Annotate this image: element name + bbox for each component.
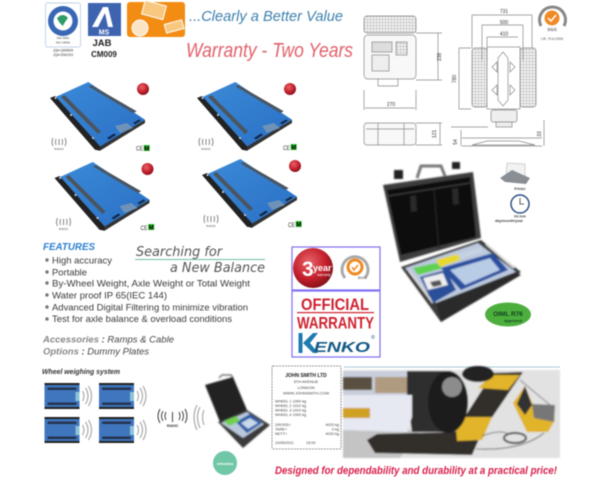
logo: Kenko: ® — [371, 334, 375, 341]
signal waves — [194, 405, 204, 430]
panel: warranty badges — [292, 247, 380, 357]
accessories and options: Accessories : Ramps & Cable — [42, 334, 174, 344]
printed receipt: JOHN SMITH LTD — [285, 373, 327, 379]
printed receipt: LONDON — [297, 385, 315, 390]
wheel pad 3: CE — [140, 226, 148, 232]
drawing: pad top view — [451, 9, 536, 127]
printed receipt: WWW.JOHNSMITH.COM — [283, 390, 329, 396]
printed receipt: 5TH AVENUE — [294, 379, 319, 384]
photo: truck on weighing pads — [343, 366, 560, 458]
icon: clock: day/month/year — [495, 219, 524, 223]
icon: radio antenna: RADIO — [167, 424, 178, 428]
features list — [42, 241, 250, 356]
drawing: indicator top view — [364, 16, 443, 110]
printed receipt: 10/05/2011 — [275, 441, 294, 445]
icon: clock: hh:mm — [514, 214, 526, 218]
printed receipt: 0 kg — [332, 428, 339, 432]
official warranty text: WARRANTY — [297, 314, 375, 332]
wheel pad 4 — [202, 159, 302, 229]
wheel pad 4: CE — [288, 223, 295, 229]
panel: wheel pads — [50, 82, 302, 232]
badge: OIML R76: OIML R76 — [493, 311, 523, 318]
icon: radio antenna — [158, 409, 187, 428]
logo: MS JAB: JAB — [92, 38, 112, 49]
printed receipt: WHEEL 2 1010 kg — [275, 404, 306, 408]
icon: SGS certification: SGS — [547, 27, 557, 32]
badge: 3 year warranty — [293, 248, 333, 288]
printed receipt — [272, 366, 341, 449]
accessories and options: Options : Dummy Plates — [43, 346, 150, 356]
tagline: dependability: Designed for dependability and durability at a practical price! — [275, 465, 557, 477]
logo: Kenko — [298, 333, 375, 356]
technical drawing — [364, 9, 544, 146]
logo: ISO certification: ISO 9001 — [57, 36, 70, 40]
wheel pad 1 — [50, 82, 150, 152]
drawing: pad side view: 33 — [537, 131, 543, 137]
features heading: FEATURES — [43, 241, 95, 253]
icon: clock — [495, 195, 529, 223]
badge: OIML R76 — [485, 302, 531, 326]
bullet items: High accuracy — [52, 256, 112, 266]
bullet items: Advanced Digital Filtering to minimize vibration — [52, 302, 248, 312]
drawing: indicator top view: 270 — [387, 102, 395, 108]
wheel pad 4: M — [296, 222, 301, 228]
drawing: pad side view — [453, 120, 544, 146]
badge: green circle logo — [213, 451, 237, 475]
printed receipt: 4020 kg — [325, 432, 339, 436]
badge: 3 year warranty: warranty — [317, 273, 331, 277]
small pad bottom left — [44, 417, 92, 443]
official warranty text — [297, 295, 375, 332]
icon: SGS certification — [540, 7, 566, 41]
drawing: pad side view: 54 — [453, 139, 459, 145]
logo: MS JAB — [88, 3, 121, 59]
drawing: pad top view: 410 — [500, 32, 508, 38]
tagline: searching for a new balance: a New Balance — [170, 261, 265, 276]
drawing: pad top view: 780 — [452, 75, 458, 83]
logo: ISO certification — [46, 3, 80, 57]
badge: OIML R76: Approved — [504, 319, 523, 323]
drawing: indicator side view: 121 — [432, 130, 438, 138]
drawing: pad top view: 731 — [500, 9, 508, 15]
logo: ISO certification: JQA=QM3609 — [53, 48, 73, 52]
diagram: wheel weighing system — [42, 367, 270, 475]
logo: ISO certification: JQA=EM1203 — [53, 53, 73, 57]
diagram heading: Wheel weighing system — [42, 367, 120, 376]
wheel pad 2: CE — [283, 146, 290, 152]
printed receipt: 15:00 — [306, 441, 316, 445]
wheel pad 3: M — [149, 226, 154, 232]
icon: SGS certification: LIR. 75-6-03/06 — [541, 37, 563, 41]
bullet items: Test for axle balance & overload conditions — [52, 314, 232, 324]
warranty heading: Warranty - Two Years — [186, 40, 353, 62]
icon: orange scale badge — [127, 0, 185, 37]
logo: Kenko: ENKO — [314, 340, 371, 356]
wheel pad 1: M — [144, 146, 149, 152]
wheel pad 4: RADIO — [206, 224, 216, 228]
printed receipt: WHEEL 1 1000 kg — [275, 400, 306, 404]
small pad top right — [99, 383, 146, 409]
accessories and options — [42, 334, 174, 356]
drawing: indicator side view — [364, 123, 442, 145]
wheel pad 3 — [54, 162, 154, 232]
wheel pad 3: RADIO — [59, 227, 69, 231]
wheel pad 1: RADIO — [54, 147, 64, 151]
bullet items: By-Wheel Weight, Axle Weight or Total Weight — [52, 278, 250, 288]
wheel pad 1: CE — [136, 146, 143, 152]
rule above photo — [344, 366, 560, 368]
wheel pad 2: M — [291, 146, 296, 152]
logo: ISO certification: ISO 14001 — [56, 40, 71, 44]
wheel pad 2 — [197, 82, 297, 152]
badge: green circle logo: minebea — [217, 461, 234, 466]
printed receipt: WHEEL 4 1000 kg — [275, 413, 306, 417]
tagline: searching for a new balance: Searching for — [136, 245, 224, 260]
photo: indicator in open case — [383, 162, 521, 322]
badge: 3 year warranty: year — [313, 263, 332, 273]
wheel pad 2: RADIO — [201, 147, 211, 151]
printed receipt: GROSS= — [275, 423, 292, 427]
icon: printer: Printer — [514, 187, 526, 191]
printed receipt: 4020 kg — [325, 423, 339, 427]
small pad bottom right — [99, 417, 146, 443]
logo: MS JAB: MS — [99, 30, 110, 36]
printed receipt: TARE= — [275, 428, 288, 432]
drawing: indicator top view: 238 — [437, 53, 443, 61]
drawing: pad top view: 500 — [500, 20, 508, 26]
bullet items: Water proof IP 65(IEC 144) — [52, 290, 167, 300]
icon: SGS seal: SGS — [358, 275, 367, 280]
tagline: searching for a new balance — [135, 245, 265, 276]
slogan: ...Clearly a Better Value — [189, 9, 343, 25]
bullet items: Portable — [52, 268, 87, 278]
small pad top left — [44, 383, 92, 409]
icon: printer — [500, 163, 530, 191]
bullet items — [45, 256, 250, 324]
printed receipt: NETT= — [275, 432, 288, 436]
printed receipt: WHEEL 3 1010 kg — [275, 408, 306, 412]
small indicator case — [205, 375, 270, 448]
badge: 3 year warranty: 3 — [302, 258, 314, 281]
logo: MS JAB: CM009 — [91, 50, 117, 59]
official warranty text: OFFICIAL — [301, 295, 369, 314]
